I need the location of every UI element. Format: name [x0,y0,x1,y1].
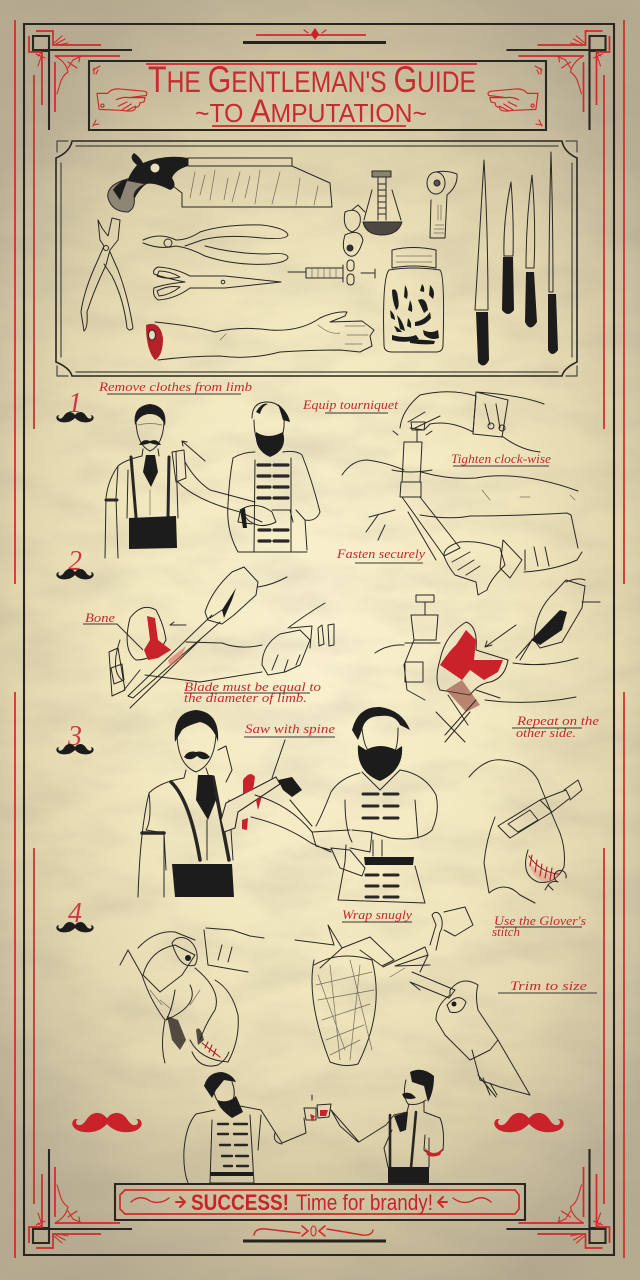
icon: scissors [154,267,281,300]
arrow: right [438,1197,447,1207]
icon: knife 4 [548,152,558,354]
icon: bone cutter [81,218,133,331]
banner: success [115,1184,525,1220]
step 1 number and moustache [56,388,94,422]
icon: screw tourniquet [343,171,402,256]
label: blade must be equal: Blade must be equal to [184,680,321,694]
figure: step 3 patient [138,710,302,897]
label: repeat on the other side: other side. [516,726,576,740]
label: saw with spine: Saw with spine [245,722,336,736]
step 4 number and moustache: 4 [68,898,82,929]
label: remove clothes: Remove clothes from limb [98,380,252,394]
label: tighten clockwise: Tighten clock-wise [451,452,551,466]
figure: toasting amputee [331,1070,444,1183]
figure: step 2 cut right [375,579,600,742]
bottom ornament [243,1226,386,1241]
label: repeat on the other side [512,714,600,740]
step 2 number and moustache: 2 [68,546,82,577]
icon: leech jar [384,248,444,352]
step 3 number and moustache: 3 [67,721,82,752]
success text: SUCCESS! [191,1190,289,1215]
icon: knife 3 [525,175,537,328]
title text: THE GENTLEMAN'S GUIDE [148,59,476,100]
top ornament [243,28,386,42]
icon: bandage roll [427,171,457,238]
icon: severed arm [146,312,374,360]
panel: surgical instruments [56,141,577,376]
label: equip tourniquet: Equip tourniquet [302,398,399,412]
figure: step 3 surgeon [251,707,437,903]
icon: pointing hand left [97,89,147,111]
icon: syringe [288,260,375,285]
arrow: left [176,1197,185,1207]
figure: step 4 bandaging [120,928,264,1066]
figure: step 1 surgeon [228,402,320,552]
icon: forceps [143,225,288,264]
label: bone: Bone [85,611,116,625]
figure: step 2 cut left [109,567,334,708]
label: glover's stitch [492,914,586,939]
icon: pointing hand right [488,89,538,111]
figure: step 1 tourniquet hands [342,392,582,595]
label: blade must be equal [184,680,321,705]
step 2 number and moustache [56,546,94,579]
icon: long amputation knife [475,160,489,366]
success text: Time for brandy! [296,1190,433,1215]
figure: step 4 wrapped stump and scissors [295,907,530,1097]
label: trim to size [498,979,597,993]
label: fasten securely: Fasten securely [336,547,426,561]
label: bone [83,611,143,650]
step 1 number and moustache: 1 [68,388,82,419]
figure: step 1 patient [105,404,262,558]
label: repeat on the other side: Repeat on the [516,714,600,728]
label: glover's stitch: stitch [492,925,520,939]
icon: amputation saw [108,153,332,212]
icon: red moustache left [72,1113,142,1132]
title panel [89,59,546,130]
step 4 number and moustache [56,898,94,932]
label: blade must be equal: the diameter of limb. [184,691,307,705]
title second line: ~TO AMPUTATION~ [195,93,427,129]
label: glover's stitch: Use the Glover's [494,914,586,928]
label: trim to size: Trim to size [510,979,588,993]
icon: knife 2 [502,182,514,314]
step 3 number and moustache [56,721,94,754]
figure: step 3 stitched stump [469,760,582,903]
label: wrap snugly: Wrap snugly [342,908,412,922]
icon: red moustache right [494,1113,564,1132]
figure: toasting surgeon [184,1072,331,1183]
